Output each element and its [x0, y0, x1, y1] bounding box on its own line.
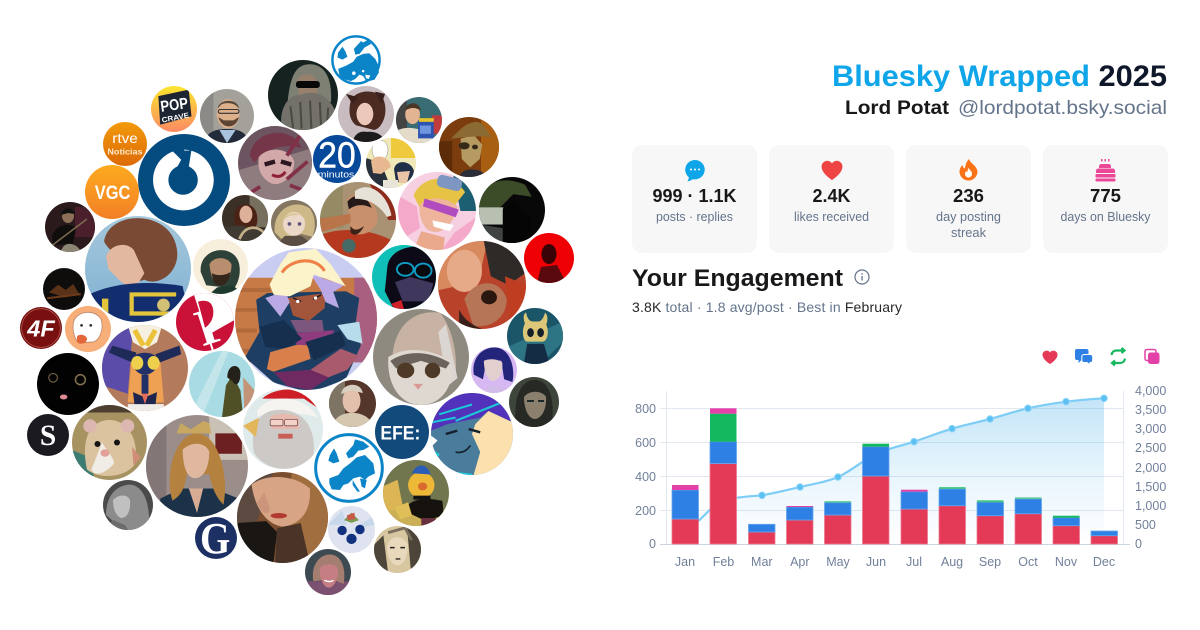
avatar: 20 minutos logo: 20 — [318, 135, 356, 176]
right axis labels: 3,000 — [1135, 422, 1166, 436]
avatar: dark silhouette in cave — [479, 177, 545, 243]
avatar: pop crave logo: POP — [159, 95, 189, 116]
avatar: cat in beanie — [373, 309, 469, 405]
avatar: clown anime character — [238, 126, 312, 200]
avatar: rtve noticias logo: Noticias — [107, 148, 143, 157]
left axis labels: 600 — [635, 436, 656, 450]
title: Bluesky Wrapped 2025 — [832, 60, 1167, 93]
icon: chat bubble — [685, 160, 705, 181]
icon: cake — [1096, 159, 1116, 182]
avatar: red portrait — [524, 233, 574, 283]
right axis labels: 500 — [1135, 518, 1156, 532]
right axis labels: 4,000 — [1135, 384, 1166, 398]
month labels: Aug — [941, 555, 963, 569]
avatar: screaming face close-up — [438, 241, 526, 329]
panel: streak stat — [906, 145, 1031, 253]
avatar: hamster — [72, 405, 147, 480]
avatar: pop crave logo — [151, 86, 197, 132]
avatar: blonde woman with paper crown — [146, 415, 248, 517]
avatar: orange sketch character — [65, 306, 111, 352]
avatar: europe map small — [331, 35, 381, 85]
month labels: Nov — [1055, 555, 1078, 569]
avatar: black cat in dark — [37, 353, 99, 415]
avatar: efe logo: EFE: — [380, 423, 420, 445]
avatar: vgc logo: VGC — [95, 182, 130, 204]
grid and axes — [660, 391, 1130, 544]
icon: reposts legend — [1112, 348, 1125, 366]
avatar: crystal disc — [328, 506, 375, 553]
stat label: day posting — [936, 210, 1001, 224]
panel: days on bluesky stat — [1043, 145, 1168, 253]
avatar: rtve noticias logo — [103, 122, 147, 166]
month labels — [675, 555, 1115, 569]
avatar: purple blue anime man — [431, 393, 513, 475]
avatar: wavy haired woman — [237, 472, 328, 563]
avatar: hollow knight — [507, 308, 563, 364]
avatar: central character arms crossed — [235, 248, 377, 390]
avatar: woman with cat ears — [338, 86, 394, 142]
avatar: santa claus — [243, 389, 323, 469]
avatar: manga drawing — [374, 526, 421, 573]
month labels: Sep — [979, 555, 1001, 569]
subtitle: handle: @lordpotat.bsky.social — [958, 97, 1167, 119]
avatar: 20 minutos logo: minutos — [318, 170, 354, 181]
avatar: woman driving — [222, 195, 268, 241]
avatar: yellow puppet — [383, 460, 449, 526]
avatar: g logo navy: G — [200, 513, 230, 563]
avatar: blue ring logo — [138, 134, 230, 226]
heading: your engagement: Your Engagement — [632, 265, 843, 292]
avatar: man holding book — [396, 97, 442, 143]
stat label: posts · replies — [656, 210, 733, 224]
avatar: woman in ice landscape — [189, 351, 255, 417]
avatar: bw portrait — [103, 480, 153, 530]
stacked bars: likes — [672, 464, 1118, 544]
avatar: dark haired warrior — [509, 377, 559, 427]
stat label: likes received — [794, 210, 869, 224]
avatar: p logo white on red — [176, 293, 234, 351]
right axis labels: 2,500 — [1135, 441, 1166, 455]
avatar: s logo black: S — [40, 420, 56, 452]
subtitle: display name: Lord Potat — [845, 97, 950, 119]
month labels: May — [826, 555, 851, 569]
left axis labels: 400 — [635, 470, 656, 484]
stat label second line: streak — [951, 226, 987, 240]
avatar: vgc logo — [85, 165, 139, 219]
cumulative line — [685, 398, 1104, 531]
avatar: s logo black — [27, 414, 69, 456]
avatar: p logo white on red: P — [188, 293, 237, 358]
right axis labels: 0 — [1135, 537, 1142, 551]
panel: posts and replies stat — [632, 145, 757, 253]
stacked bars: replies — [672, 442, 1118, 536]
icon: flame — [960, 159, 978, 180]
chart legend — [1042, 348, 1160, 366]
icon: heart — [822, 161, 842, 180]
icon: replies legend — [1075, 349, 1093, 365]
stat value: 999 · 1.1K — [652, 185, 737, 206]
month labels: Oct — [1018, 555, 1038, 569]
avatar: girl with boca juniors shirt — [85, 216, 191, 322]
avatar: man with glasses and beard — [200, 89, 254, 143]
month labels: Mar — [751, 555, 773, 569]
right axis labels: 2,000 — [1135, 461, 1166, 475]
avatar: anime man with pink feathers — [398, 172, 476, 250]
avatar: dark night city — [43, 268, 85, 310]
month labels: Jul — [906, 555, 922, 569]
stat label: days on Bluesky — [1060, 210, 1151, 224]
avatar: 4f red logo — [20, 307, 62, 349]
right axis labels: 3,500 — [1135, 403, 1166, 417]
avatar: efe logo — [375, 405, 429, 459]
avatar: manga couple — [366, 138, 416, 188]
combo chart — [635, 384, 1166, 569]
cumulative area — [685, 398, 1104, 544]
avatar: man with beard portrait — [193, 239, 248, 294]
avatar: blonde anime girl — [271, 200, 317, 246]
avatar: pop crave logo: CRAVE — [161, 111, 190, 125]
right axis labels — [1135, 384, 1166, 551]
month labels: Jun — [866, 555, 886, 569]
avatar: man with santa hat drinking — [320, 182, 396, 258]
avatar: blue haired anime — [471, 347, 517, 393]
stacked bars: reposts — [710, 414, 1080, 518]
stat value: 236 — [953, 185, 984, 206]
avatar: yellow eyed demon character — [102, 325, 188, 411]
panel: likes stat — [769, 145, 894, 253]
left axis labels — [635, 402, 656, 551]
month labels: Feb — [713, 555, 734, 569]
avatar: 4f red logo: 4F — [26, 315, 55, 341]
icon: quotes legend — [1145, 350, 1160, 364]
avatar: woman smiling dusky — [305, 549, 351, 595]
avatar: weathered statue in hat — [439, 117, 499, 177]
right axis labels: 1,000 — [1135, 499, 1166, 513]
stat value: 775 — [1090, 185, 1121, 206]
cumulative dots — [759, 395, 1107, 499]
avatar: man in beanie — [329, 380, 376, 427]
avatar: gandalf with sunglasses — [268, 60, 338, 130]
icon: info — [855, 270, 869, 284]
engagement summary: 3.8K total · 1.8 avg/post · Best in February — [632, 299, 902, 315]
avatar: rtve noticias logo: rtve — [112, 130, 138, 146]
left axis labels: 800 — [635, 402, 656, 416]
month labels: Apr — [790, 555, 810, 569]
right axis labels: 1,500 — [1135, 480, 1166, 494]
left axis labels: 200 — [635, 504, 656, 518]
left axis labels: 0 — [649, 537, 656, 551]
month labels: Dec — [1093, 555, 1115, 569]
stat value: 2.4K — [812, 185, 851, 206]
month labels: Jan — [675, 555, 695, 569]
panel: avatar bubble cluster — [20, 36, 574, 595]
avatar: violinist — [45, 202, 95, 252]
avatar: darth vader with blue sunglasses — [372, 245, 436, 309]
avatar: europe map large — [314, 433, 384, 503]
stacked bars: quotes — [672, 408, 928, 507]
icon: likes legend — [1042, 351, 1058, 364]
